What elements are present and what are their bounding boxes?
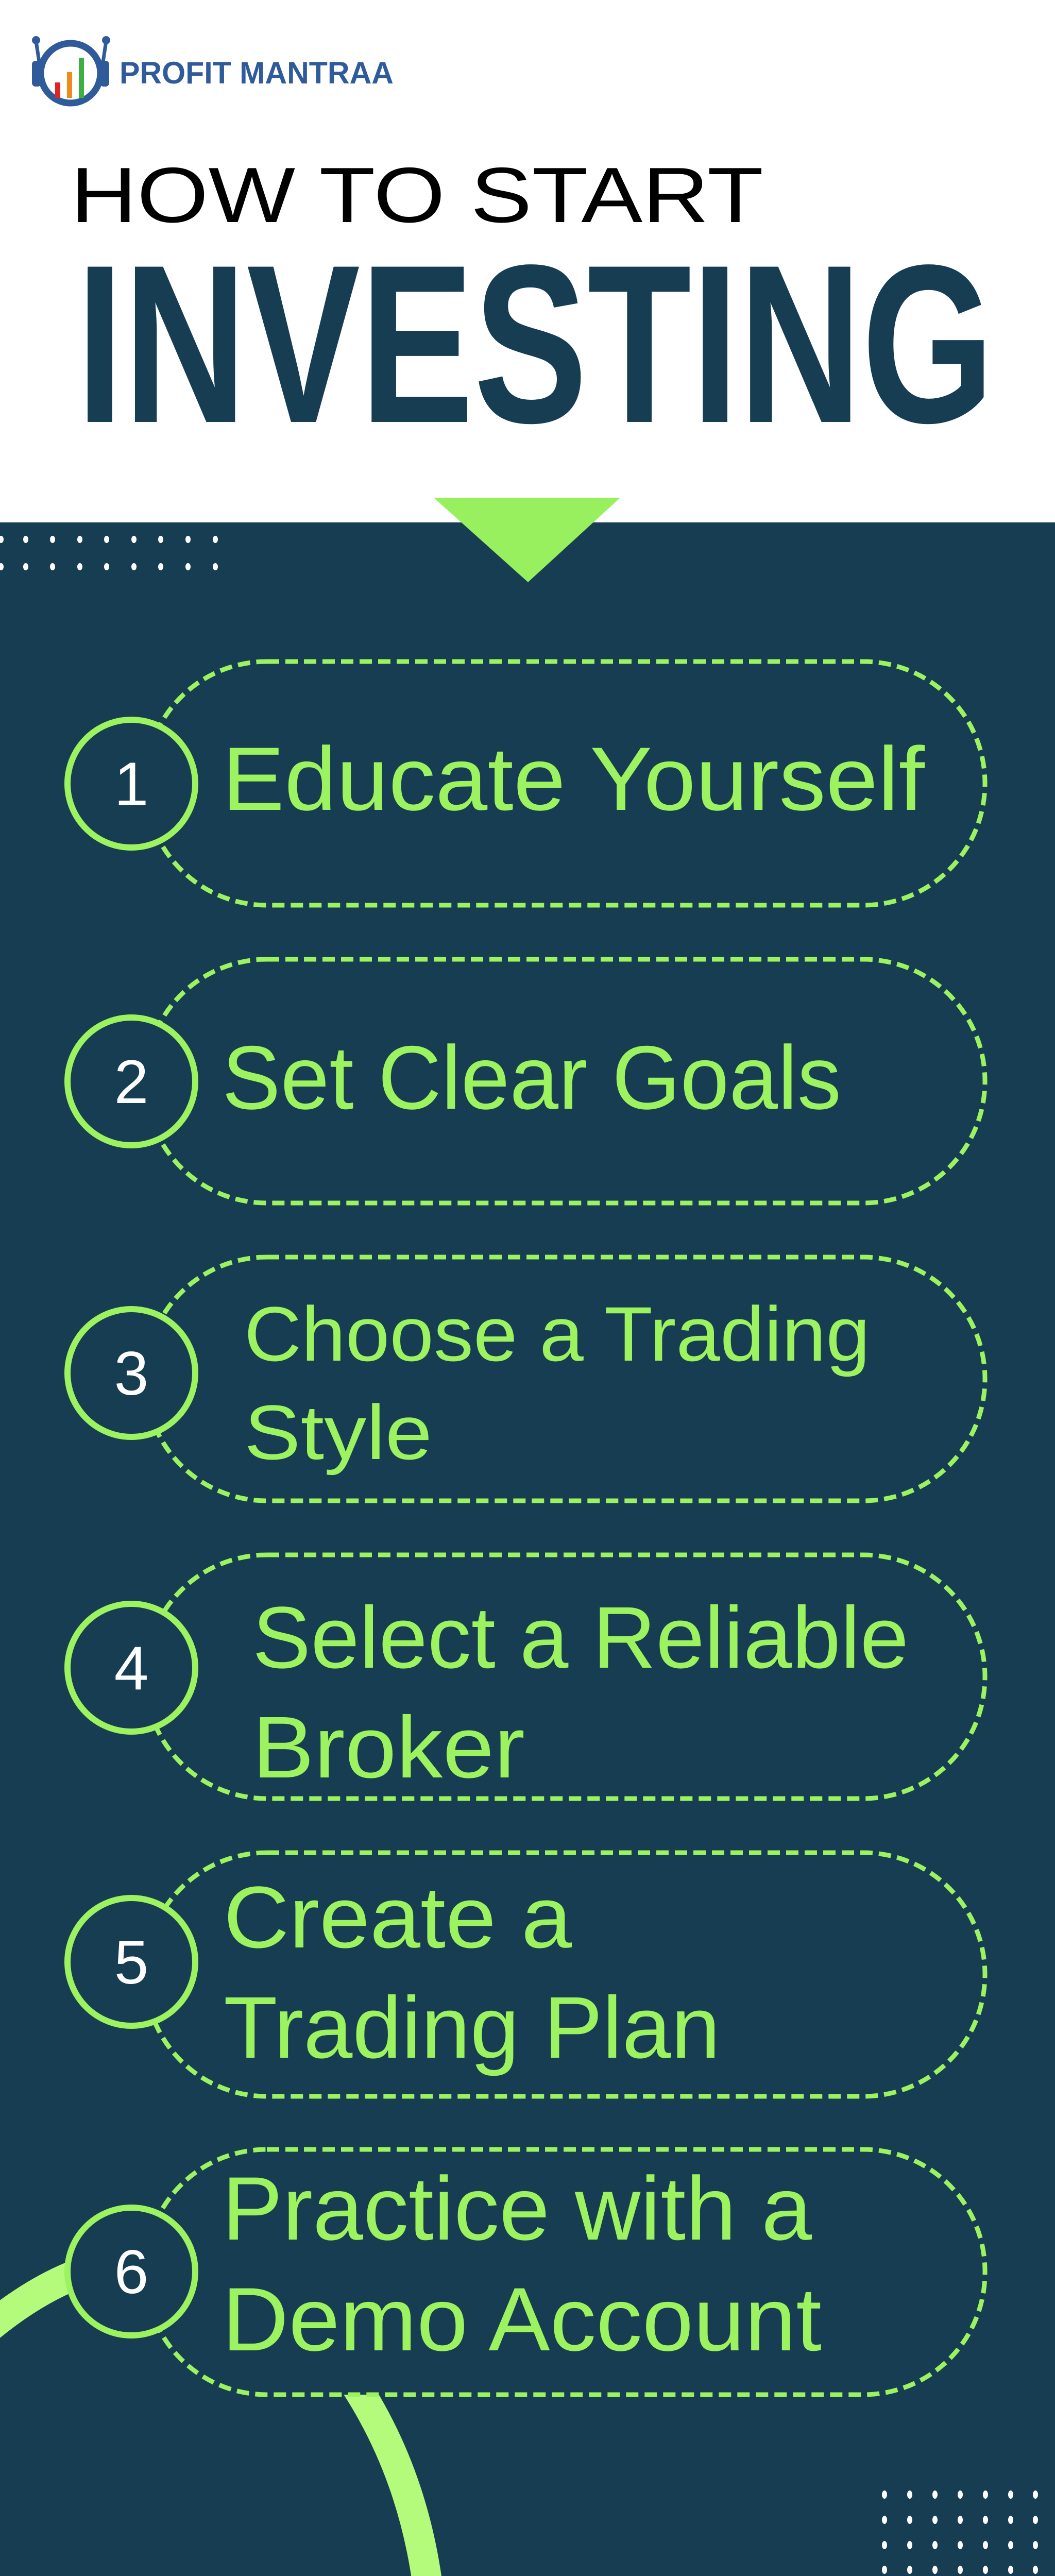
number circle 1 bbox=[67, 720, 195, 848]
step 3: Choose a Trading Style bbox=[67, 1257, 985, 1501]
step text 3 bbox=[244, 1291, 870, 1476]
step text 2: Set Clear Goals bbox=[222, 1028, 841, 1128]
step 5: Create a Trading Plan bbox=[67, 1853, 985, 2096]
number circle 5 bbox=[67, 1898, 195, 2026]
number circle 4: 4 bbox=[114, 1634, 148, 1703]
number circle 2 bbox=[67, 1018, 195, 1145]
icon: green down triangle bbox=[434, 498, 620, 582]
step text 5: Trading Plan bbox=[224, 1979, 720, 2077]
dots top-left bbox=[0, 536, 218, 570]
number circle 5: 5 bbox=[114, 1928, 148, 1997]
step text 4 bbox=[252, 1589, 909, 1797]
title: HOW TO START: HOW TO START bbox=[71, 151, 763, 239]
step text 4: Select a Reliable bbox=[252, 1589, 909, 1687]
step 6: Practice with a Demo Account bbox=[67, 2149, 985, 2395]
dark background band bbox=[0, 522, 1055, 2576]
step text 6: Practice with a bbox=[222, 2159, 812, 2259]
number circle 4 bbox=[67, 1604, 195, 1732]
logo bbox=[32, 36, 394, 103]
number circle 6: 6 bbox=[114, 2238, 148, 2307]
step text 3: Choose a Trading bbox=[244, 1291, 870, 1377]
step text 5 bbox=[224, 1869, 720, 2077]
step text 6: Demo Account bbox=[222, 2269, 822, 2370]
step text 5: Create a bbox=[224, 1869, 572, 1967]
step 1: Educate Yourself bbox=[67, 662, 985, 905]
decorative green arc bbox=[0, 2260, 433, 2576]
logo text: PROFIT MANTRAA bbox=[120, 56, 394, 90]
step text 1: Educate Yourself bbox=[222, 729, 925, 829]
step text 6 bbox=[222, 2159, 822, 2370]
dots bottom-right bbox=[882, 2490, 1038, 2574]
number circle 2: 2 bbox=[114, 1047, 148, 1116]
number circle 6 bbox=[67, 2208, 195, 2335]
step 2: Set Clear Goals bbox=[67, 959, 985, 1203]
step text 4: Broker bbox=[252, 1699, 525, 1797]
step text 3: Style bbox=[244, 1389, 432, 1476]
icon: logo ring with bars bbox=[32, 36, 110, 103]
number circle 3: 3 bbox=[114, 1339, 148, 1408]
number circle 3 bbox=[67, 1309, 195, 1437]
step 4: Select a Reliable Broker bbox=[67, 1555, 985, 1799]
number circle 1: 1 bbox=[114, 750, 148, 819]
